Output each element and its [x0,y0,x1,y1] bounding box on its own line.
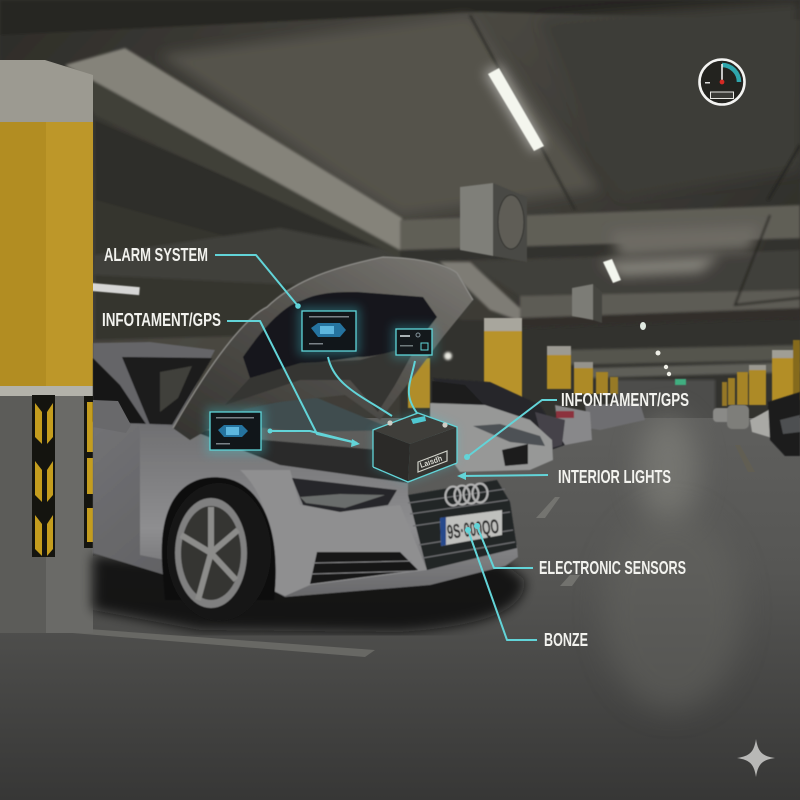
ventilation fans [460,183,602,323]
garage floor [0,415,800,800]
connector lines [215,255,557,640]
icon: sparkle [737,739,775,777]
main grille [408,480,517,570]
car shadow [93,555,525,632]
label: infotament/gps left: INFOTAMENT/GPS [102,310,221,330]
four rings [446,484,488,506]
screen panel: left [206,408,265,454]
label: bonze: BONZE [544,630,588,650]
car [93,342,525,632]
car battery [373,412,457,482]
mirror [93,400,131,433]
open hood [173,257,473,440]
front fender and bumper [140,425,518,597]
car cabin [93,342,215,430]
bumper corner [240,470,427,596]
headlight [292,478,397,512]
left pillar [0,60,93,633]
screen panel: top [298,307,360,355]
background: garage ceiling [0,0,800,440]
yellow background pillars [408,318,800,414]
front wheel [167,483,271,621]
ceiling beams [65,15,800,378]
car door side [93,422,290,596]
label: interior lights: INTERIOR LIGHTS [558,467,671,487]
licence plate [440,510,502,546]
icon: gauge [700,60,744,104]
wheel arch [162,477,276,600]
licence plate: 9S·000QO [446,516,500,544]
side window [122,357,212,425]
battery label: Laisdh [419,454,443,470]
label: electronic sensors: ELECTRONIC SENSORS [539,558,686,578]
ceiling lights [91,66,671,376]
corner guard stripes [32,395,93,557]
label: infontament/gps right: INFONTAMENT/GPS [561,390,689,410]
parked cars right row [713,392,800,456]
label: alarm system: ALARM SYSTEM [104,245,208,265]
engine bay [178,425,408,483]
parked cars left row [430,378,645,472]
lower intake [310,552,418,584]
screen panel: small top right [392,325,436,359]
